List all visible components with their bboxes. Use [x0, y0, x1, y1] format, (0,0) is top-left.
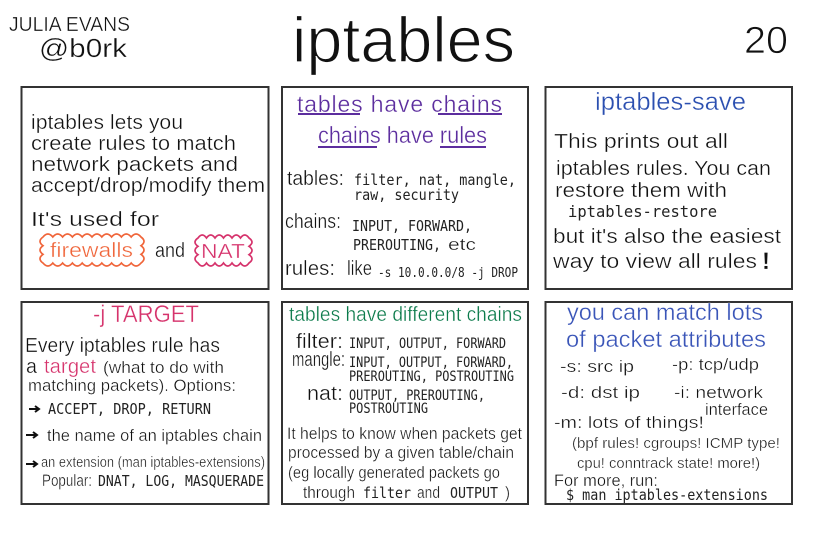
option list: ACCEPT, DROP, RETURN	[48, 400, 211, 418]
firewalls badge	[40, 234, 144, 266]
heading	[566, 299, 766, 352]
flags: -p: tcp/udp	[672, 355, 759, 374]
tables row	[287, 168, 516, 204]
table list: POSTROUTING	[349, 401, 428, 417]
option list: an extension (man iptables-extensions)	[41, 454, 265, 471]
intro text	[31, 112, 265, 262]
description: restore them with	[555, 180, 727, 202]
table list: mangle:	[292, 349, 345, 371]
heading: iptables-save	[595, 88, 746, 116]
author credit: @b0rk	[39, 33, 128, 63]
rules row: rules:	[285, 258, 335, 280]
arrows	[26, 406, 39, 467]
flags: -m: lots of things!	[554, 413, 704, 432]
heading: you can match lots	[567, 299, 763, 325]
man page hint	[554, 471, 768, 504]
chains row: chains:	[285, 211, 341, 233]
table list: OUTPUT, PREROUTING,	[349, 388, 485, 404]
explanation: processed by a given table/chain	[288, 443, 514, 462]
page number: 20	[744, 20, 788, 62]
chains row: INPUT, FORWARD,	[352, 217, 472, 235]
flags: cpu! conntrack state! more!)	[577, 455, 760, 472]
explanation	[287, 424, 522, 502]
description: (what to do with	[103, 358, 224, 377]
panel: intro	[22, 87, 268, 289]
panel: tables have different chains	[282, 302, 528, 504]
table list: PREROUTING, POSTROUTING	[349, 369, 514, 385]
intro text: and	[155, 240, 185, 262]
table list: filter:	[296, 331, 343, 353]
man page hint: $ man iptables-extensions	[566, 486, 768, 504]
intro text: create rules to match	[31, 133, 236, 155]
NAT badge: NAT	[201, 241, 245, 263]
chains row	[285, 211, 477, 254]
explanation: It helps to know when packets get	[287, 424, 522, 443]
panel: iptables-save	[546, 87, 792, 289]
panel: tables have chains	[282, 87, 528, 289]
option list: the name of an iptables chain	[47, 426, 262, 445]
firewalls badge: firewalls	[50, 240, 133, 262]
tables row: filter, nat, mangle,	[354, 171, 516, 189]
description	[552, 131, 781, 275]
intro text: iptables lets you	[31, 112, 183, 134]
tables row: tables:	[287, 168, 344, 190]
title: iptables	[292, 4, 515, 76]
tables row: raw, security	[354, 186, 459, 204]
option list: DNAT, LOG, MASQUERADE	[98, 472, 264, 490]
heading	[297, 91, 502, 148]
option list: Popular:	[42, 471, 92, 490]
description: target	[44, 356, 96, 378]
heading: of packet attributes	[566, 326, 766, 352]
table list	[292, 331, 514, 417]
man page hint: For more, run:	[554, 471, 658, 490]
option list	[41, 400, 265, 490]
intro text: network packets and	[31, 154, 238, 176]
table list: INPUT, OUTPUT, FORWARD,	[349, 355, 513, 371]
NAT badge	[195, 235, 252, 266]
description	[25, 335, 236, 395]
flags: -d: dst ip	[561, 383, 640, 402]
rules row: like	[347, 258, 372, 280]
explanation: (eg locally generated packets go	[288, 463, 500, 482]
flags: interface	[705, 400, 768, 419]
description: way to view all rules	[552, 251, 757, 273]
rules row: -s 10.0.0.0/8 -j DROP	[378, 266, 518, 281]
heading: tables have chains	[297, 91, 502, 117]
panel: -j TARGET	[22, 301, 268, 504]
chains row: PREROUTING,	[353, 236, 441, 254]
flags: (bpf rules! cgroups! ICMP type!	[572, 435, 780, 452]
description: a	[26, 356, 38, 378]
flags: -s: src ip	[560, 357, 634, 376]
description: This prints out all	[554, 131, 728, 153]
explanation: filter	[363, 484, 411, 502]
explanation: through	[303, 483, 355, 502]
description: iptables rules. You can	[556, 158, 771, 180]
explanation: OUTPUT	[450, 484, 498, 502]
intro text: accept/drop/modify them	[31, 175, 265, 197]
panel: match packet attributes	[546, 299, 792, 504]
table list: nat:	[307, 383, 343, 405]
explanation: )	[505, 483, 510, 502]
flags	[554, 355, 780, 472]
explanation: and	[417, 483, 440, 502]
intro text: It's used for	[31, 209, 159, 231]
description: !	[762, 248, 770, 275]
heading: tables have different chains	[289, 304, 522, 326]
chains row: etc	[448, 235, 477, 254]
table list: INPUT, OUTPUT, FORWARD	[349, 336, 506, 352]
flags: -i: network	[674, 383, 764, 402]
heading: -j TARGET	[93, 301, 199, 328]
author credit: JULIA EVANS	[9, 14, 130, 36]
description: iptables-restore	[568, 202, 717, 221]
heading: chains have rules	[318, 122, 487, 148]
description: Every iptables rule has	[25, 335, 220, 357]
description: matching packets). Options:	[28, 376, 236, 395]
rules row	[285, 258, 518, 281]
author credit	[9, 14, 130, 63]
description: but it's also the easiest	[553, 226, 781, 248]
